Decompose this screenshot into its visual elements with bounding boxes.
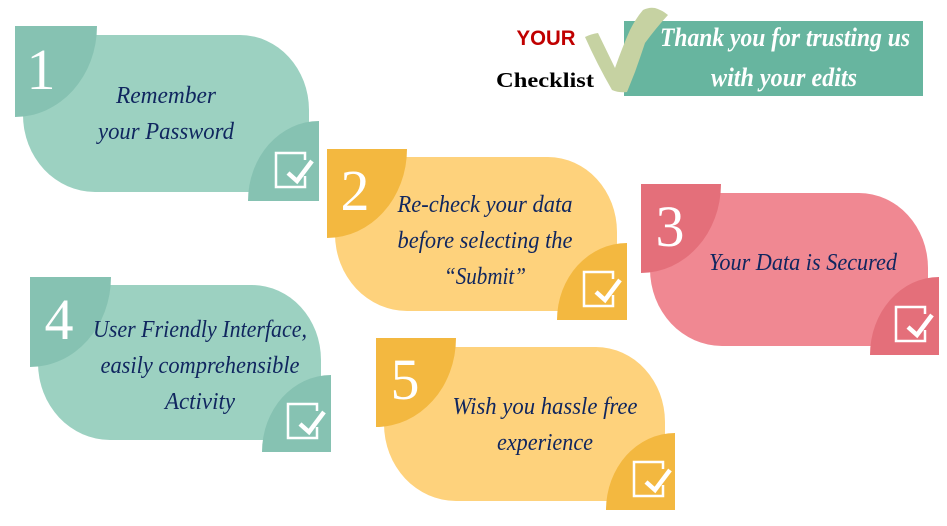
number 5: 5: [390, 347, 420, 412]
number 3: 3: [656, 194, 684, 259]
text: remember your password: your Password: [96, 119, 235, 145]
text: wish you: Wish you hassle free: [452, 394, 638, 420]
number 1: 1: [26, 37, 56, 102]
icon: checkbox 5: [634, 462, 670, 496]
panel: item 5: [376, 338, 675, 510]
panel: thank you banner: [585, 8, 923, 96]
banner text: with your edits: [711, 63, 857, 92]
text: re-check: Re-check your data: [397, 192, 572, 218]
text: remember your password: Remember: [115, 83, 217, 109]
text: wish you: [452, 394, 638, 456]
text: your data is secured: Your Data is Secured: [709, 250, 898, 276]
panel: item 1: [15, 26, 319, 201]
text: re-check: [397, 192, 573, 290]
heading: your: YOUR: [516, 27, 576, 50]
text: user friendly: [93, 317, 307, 415]
heading: checklist: Checklist: [496, 68, 594, 92]
text: user friendly: User Friendly Interface,: [93, 317, 307, 343]
banner text: Thank you for trusting us: [660, 23, 910, 52]
text: user friendly: easily comprehensible: [100, 353, 300, 379]
icon: checkbox 4: [288, 404, 324, 438]
icon: checkbox 1: [276, 153, 312, 187]
text: user friendly: Activity: [163, 389, 235, 415]
number 4: 4: [44, 287, 74, 352]
text: re-check: before selecting the: [398, 228, 573, 254]
icon: checkbox 3: [896, 307, 932, 341]
text: wish you: experience: [497, 430, 593, 456]
number 2: 2: [340, 158, 370, 223]
text: re-check: “Submit”: [444, 264, 526, 290]
panel: item 4: [30, 277, 331, 452]
banner text: [660, 23, 910, 92]
panel: item 2: [327, 149, 627, 320]
panel: item 3: [641, 184, 939, 355]
text: remember your password: [96, 83, 235, 145]
icon: large check mark: [585, 8, 668, 92]
icon: checkbox 2: [584, 272, 620, 306]
